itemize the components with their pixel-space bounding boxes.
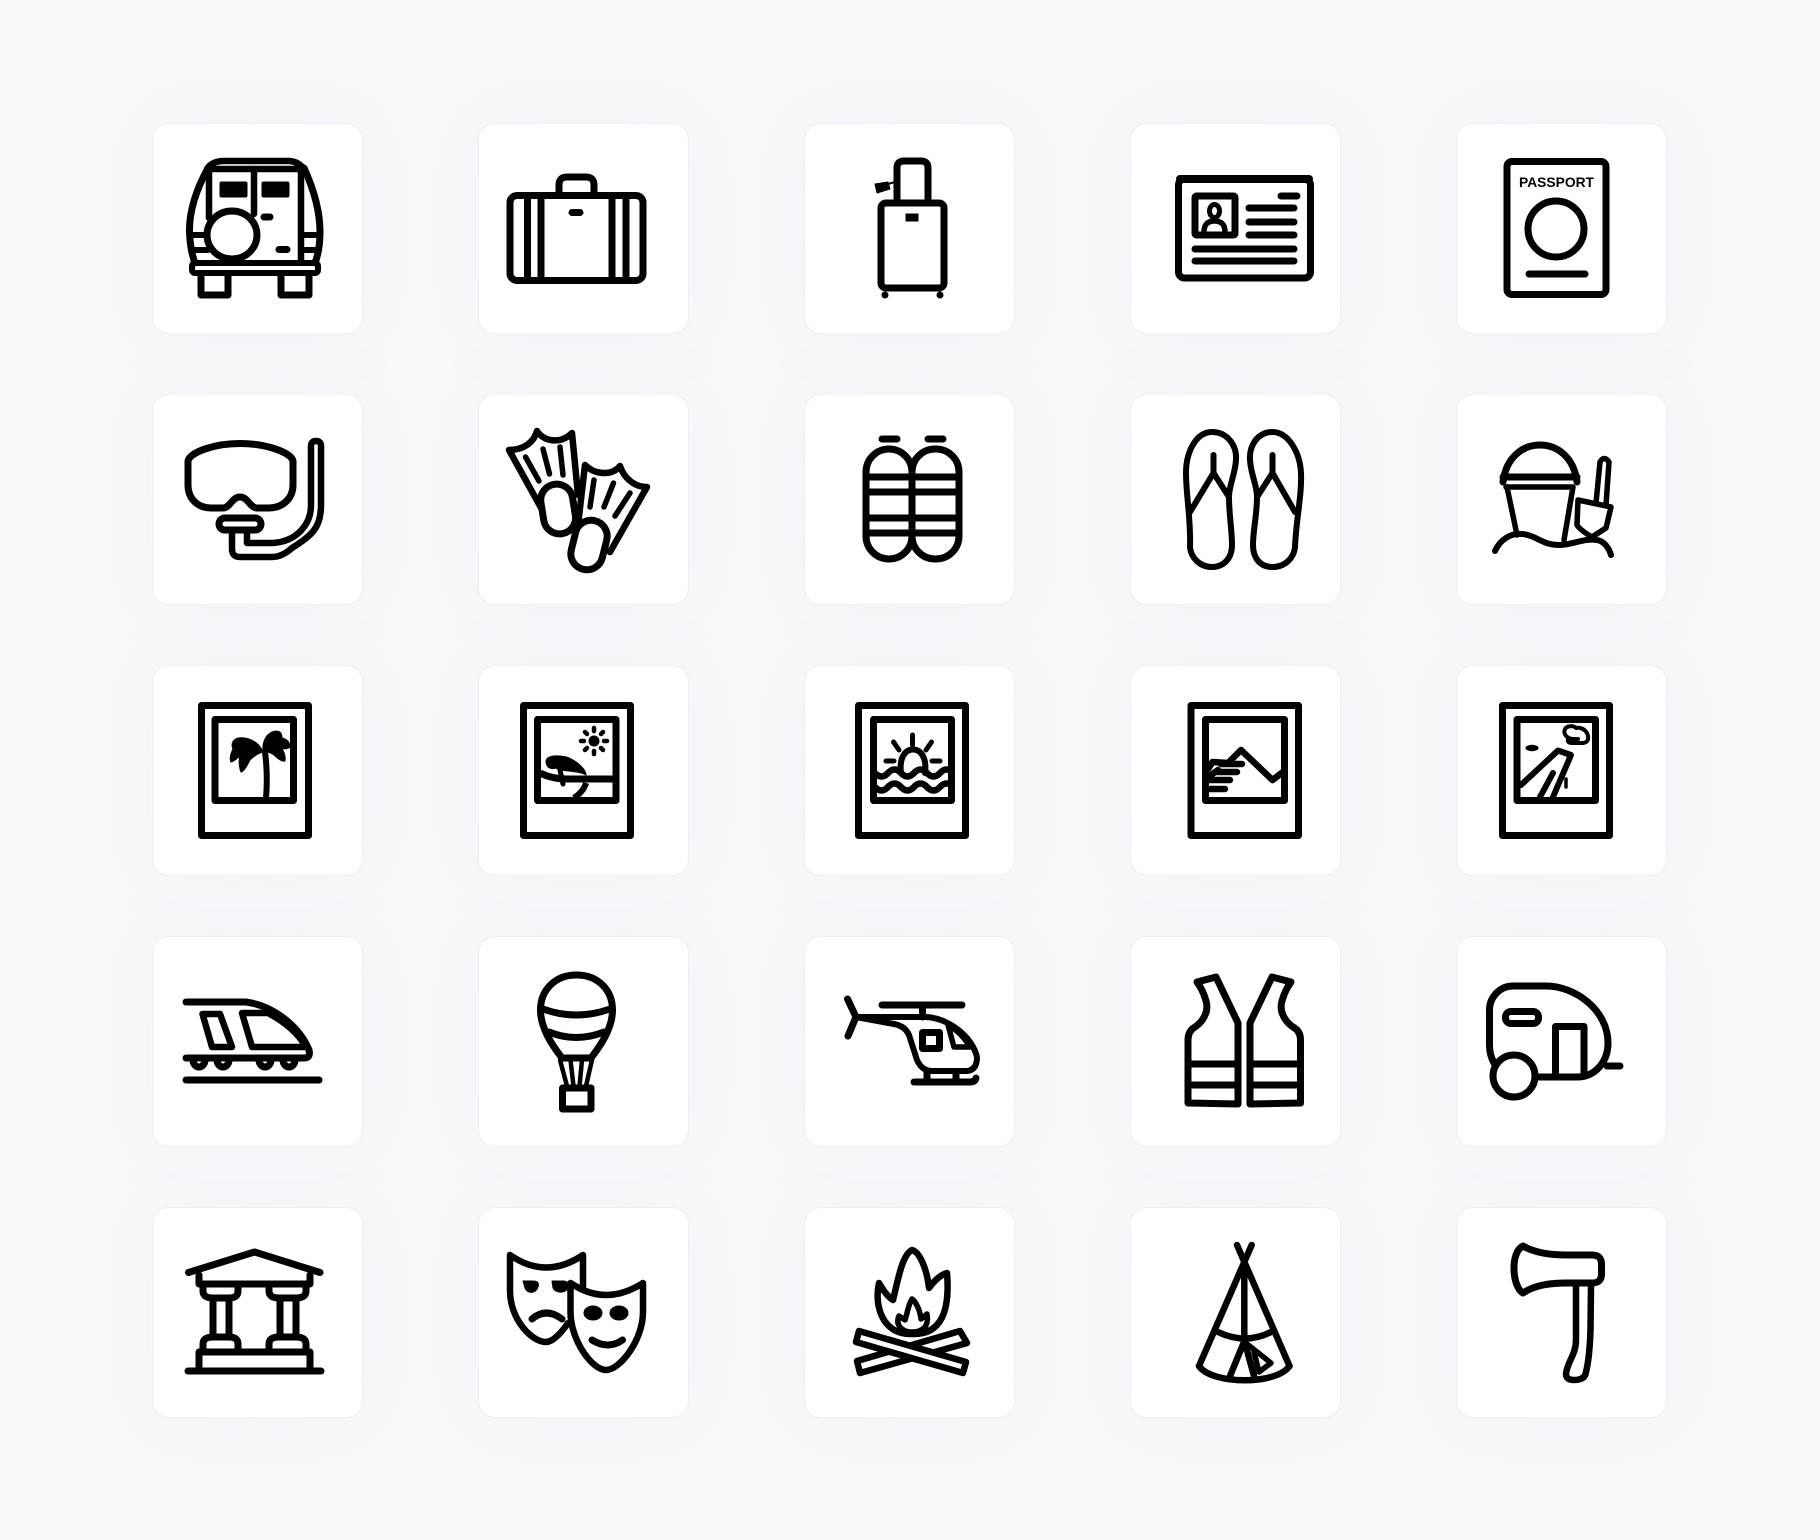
icon: classical temple: [184, 1248, 324, 1374]
icon: sand bucket and shovel: [1492, 442, 1614, 558]
card: axe: [1457, 1208, 1666, 1417]
card: mountain polaroid: [1131, 666, 1340, 875]
card: van: [153, 124, 362, 333]
icon: beach polaroid: [520, 702, 634, 839]
card: scuba tanks: [805, 395, 1014, 604]
icon: van rear view: [186, 158, 324, 298]
icon: hot air balloon: [537, 972, 616, 1112]
icon: axe: [1510, 1242, 1605, 1384]
icon: ID card: [1175, 175, 1314, 282]
icon: palm tree polaroid: [198, 702, 312, 839]
card: sand bucket and shovel: [1457, 395, 1666, 604]
card: hot air balloon: [479, 937, 688, 1146]
icon: scuba tanks: [862, 436, 962, 562]
card: theatre masks: [479, 1208, 688, 1417]
card: tipi: [1131, 1208, 1340, 1417]
card: passport: [1457, 124, 1666, 333]
icon: life vest: [1184, 974, 1304, 1108]
icon: snorkel mask: [184, 438, 324, 560]
card: sunset polaroid: [805, 666, 1014, 875]
passport label: PASSPORT: [1519, 174, 1594, 190]
card: campfire: [805, 1208, 1014, 1417]
icon: theatre masks: [506, 1252, 646, 1374]
card: life vest: [1131, 937, 1340, 1146]
icon: passport: [1504, 158, 1610, 298]
card: briefcase: [479, 124, 688, 333]
card: swim fins: [479, 395, 688, 604]
card: beach polaroid: [479, 666, 688, 875]
icon: camper trailer: [1486, 982, 1624, 1100]
card: helicopter: [805, 937, 1014, 1146]
icon: high speed train: [182, 998, 322, 1084]
icon: campfire: [852, 1246, 970, 1376]
card: palm polaroid: [153, 666, 362, 875]
icon: rolling luggage: [874, 158, 948, 298]
icon: briefcase: [506, 174, 646, 284]
card: snorkel mask: [153, 395, 362, 604]
card: temple: [153, 1208, 362, 1417]
card: ID card: [1131, 124, 1340, 333]
card: camper trailer: [1457, 937, 1666, 1146]
card: slope polaroid: [1457, 666, 1666, 875]
icon: flip flops: [1183, 429, 1304, 570]
icon: mountain polaroid: [1188, 702, 1302, 839]
card: flip flops: [1131, 395, 1340, 604]
card: rolling luggage: [805, 124, 1014, 333]
icon: tipi tent: [1196, 1242, 1293, 1384]
icon: ski slope polaroid: [1499, 702, 1613, 839]
icon: helicopter: [844, 996, 980, 1086]
card: train: [153, 937, 362, 1146]
icon: swim fins: [506, 428, 650, 574]
icon: sunset polaroid: [855, 702, 969, 839]
